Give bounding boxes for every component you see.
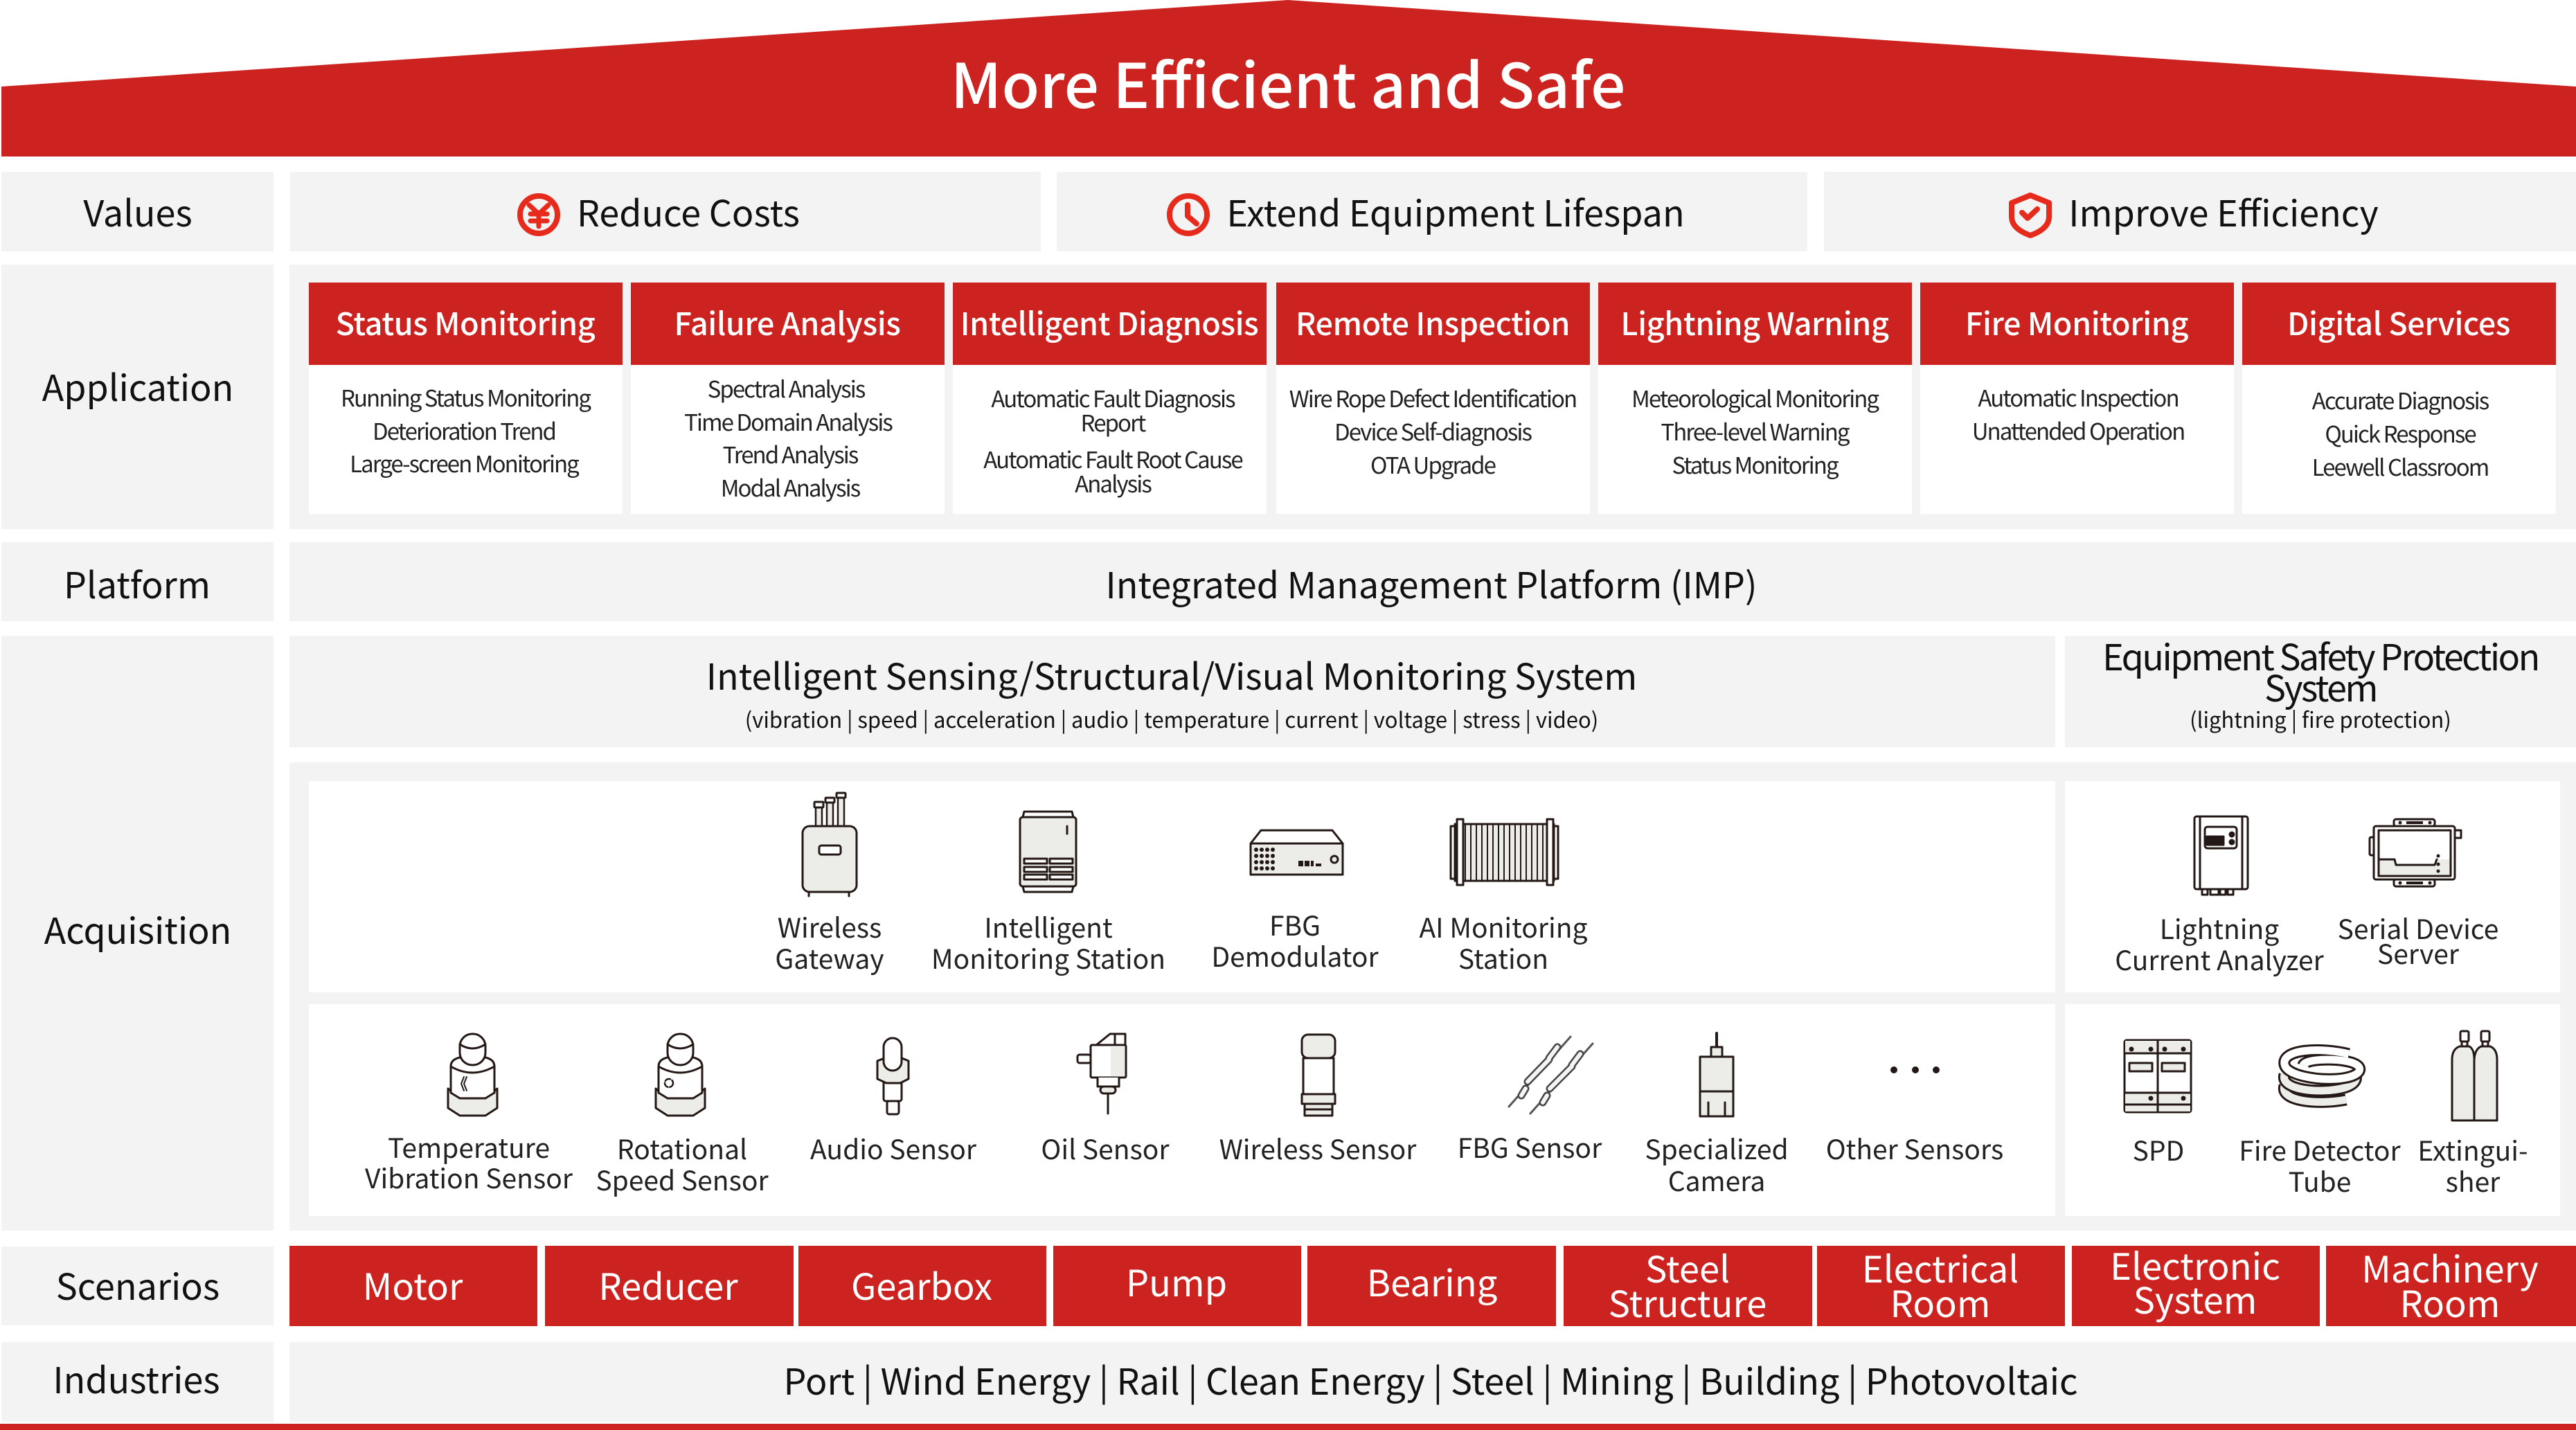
icon: extinguisher xyxy=(2452,1031,2497,1120)
icon: clock xyxy=(1170,196,1207,233)
label: serial device server: Serial Device xyxy=(2338,909,2498,947)
icon: spd xyxy=(2125,1040,2191,1112)
heading: equipment safety protection system xyxy=(2065,629,2576,747)
scenario: machinery room: Machinery xyxy=(2361,1241,2539,1294)
scenario: machinery room xyxy=(2326,1241,2576,1328)
label: wireless gateway xyxy=(775,907,884,977)
label: acquisition: Acquisition xyxy=(44,902,231,954)
icon: ai monitoring station xyxy=(1451,819,1558,885)
row: scenarios xyxy=(1,1238,2576,1328)
card: intelligent diagnosis: Analysis xyxy=(1075,466,1152,499)
icon: serial device server xyxy=(2370,819,2461,886)
scenario: steel structure: Steel xyxy=(1645,1241,1730,1294)
card: lightning warning: Three-level Warning xyxy=(1661,414,1850,447)
icon: temperature vibration sensor xyxy=(448,1034,497,1116)
label: serial device server xyxy=(2338,909,2498,972)
label: application: Application xyxy=(42,359,233,411)
card: remote inspection xyxy=(1276,283,1590,514)
label: extinguisher: Extingui- xyxy=(2417,1130,2528,1169)
label: scenarios xyxy=(1,1246,274,1325)
label: industries xyxy=(1,1342,274,1422)
label: extinguisher xyxy=(2417,1130,2528,1200)
card: fire monitoring: Fire Monitoring xyxy=(1965,299,2188,344)
card: digital services: Quick Response xyxy=(2325,416,2476,449)
card: intelligent diagnosis: Automatic Fault Root Cause xyxy=(983,442,1242,475)
card: lightning warning xyxy=(1598,283,1912,514)
scenario: reducer: Reducer xyxy=(598,1258,738,1311)
value: improve efficiency xyxy=(1824,172,2576,251)
panel: gateway devices xyxy=(309,781,2055,992)
roof banner with title xyxy=(1,0,2576,157)
card: remote inspection: Wire Rope Defect Identification xyxy=(1289,381,1576,414)
heading: equipment safety protection system: Equipment Safety Protection xyxy=(2102,629,2539,681)
value: reduce costs xyxy=(290,172,1041,251)
value: extend equipment lifespan: Extend Equipment Lifespan xyxy=(1226,185,1685,237)
card: status monitoring: Running Status Monitoring xyxy=(341,380,591,413)
label: rotational speed sensor xyxy=(596,1129,769,1199)
label: lightning current analyzer: Current Analyzer xyxy=(2115,940,2325,978)
label: fbg demodulator xyxy=(1211,905,1379,975)
label: fbg demodulator: Demodulator xyxy=(1211,936,1379,975)
card: lightning warning: Lightning Warning xyxy=(1620,299,1889,344)
scenario: steel structure: Structure xyxy=(1609,1276,1766,1328)
icon: oil sensor xyxy=(1077,1034,1126,1114)
icon: fbg sensor xyxy=(1509,1037,1593,1114)
card: fire monitoring xyxy=(1920,283,2234,514)
icon: yen coin xyxy=(520,196,557,233)
label: acquisition xyxy=(1,636,274,1231)
row: acquisition xyxy=(1,629,2576,1231)
panel: sensors xyxy=(309,1004,2055,1216)
card: failure analysis: Modal Analysis xyxy=(721,470,861,503)
card: status monitoring xyxy=(309,283,623,514)
icon: shield check xyxy=(2012,195,2049,235)
industries list: Port | Wind Energy | Rail | Clean Energy | Steel | Mining | Building | Photovoltaic xyxy=(783,1353,2078,1405)
panel: safety devices top xyxy=(2065,781,2560,992)
panel: safety devices bottom xyxy=(2065,1004,2560,1216)
scenario: motor xyxy=(289,1246,537,1326)
label: fbg demodulator: FBG xyxy=(1269,905,1321,944)
platform bar: Integrated Management Platform (IMP) xyxy=(1105,557,1757,609)
row: industries xyxy=(1,1342,2576,1422)
card: failure analysis xyxy=(631,283,945,514)
label: intelligent monitoring station xyxy=(931,907,1165,977)
scenario: gearbox xyxy=(798,1246,1046,1326)
card: status monitoring: Large-screen Monitoring xyxy=(350,446,580,479)
scenario: steel structure xyxy=(1564,1241,1812,1328)
icon: intelligent monitoring station xyxy=(1020,812,1076,892)
icon: audio sensor xyxy=(877,1038,909,1114)
label: platform: Platform xyxy=(64,557,211,609)
label: wireless sensor: Wireless Sensor xyxy=(1219,1129,1417,1168)
card: digital services: Digital Services xyxy=(2287,299,2510,344)
icon: specialized camera xyxy=(1700,1033,1733,1116)
heading: equipment safety protection system: System xyxy=(2264,660,2377,712)
label: specialized camera: Camera xyxy=(1668,1161,1765,1199)
industries list xyxy=(289,1342,2576,1422)
label: lightning current analyzer xyxy=(2115,909,2325,978)
value: reduce costs: Reduce Costs xyxy=(577,185,800,237)
bottom red bar xyxy=(0,1424,2576,1430)
label: intelligent monitoring station: Intelligent xyxy=(984,907,1113,946)
card: fire monitoring: Automatic Inspection xyxy=(1978,380,2179,413)
icon: fbg demodulator xyxy=(1251,830,1343,875)
scenario: gearbox: Gearbox xyxy=(851,1258,992,1311)
label: rotational speed sensor: Speed Sensor xyxy=(596,1160,769,1199)
scenario: electrical room: Electrical xyxy=(1862,1241,2019,1294)
scenario: electrical room: Room xyxy=(1890,1276,1991,1328)
label: temperature vibration sensor: Vibration Sensor xyxy=(365,1158,573,1197)
label: rotational speed sensor: Rotational xyxy=(617,1129,747,1168)
value: improve efficiency: Improve Efficiency xyxy=(2068,185,2379,237)
label: application xyxy=(1,265,274,529)
card: lightning warning: Meteorological Monitoring xyxy=(1631,381,1879,414)
card: failure analysis: Trend Analysis xyxy=(723,437,859,470)
label: temperature vibration sensor xyxy=(365,1127,573,1197)
scenario: pump xyxy=(1053,1246,1301,1326)
card: status monitoring: Deterioration Trend xyxy=(373,413,555,447)
label: fbg sensor: FBG Sensor xyxy=(1458,1127,1602,1166)
scenario: reducer xyxy=(545,1246,794,1326)
label: fire detector tube: Tube xyxy=(2289,1161,2351,1200)
panel: application cards xyxy=(289,265,2576,529)
card: remote inspection: Device Self-diagnosis xyxy=(1334,414,1532,447)
card: digital services xyxy=(2242,283,2556,514)
icon: fire detector tube xyxy=(2284,1051,2360,1102)
scenario: machinery room: Room xyxy=(2399,1276,2501,1328)
heading: intelligent sensing system: Intelligent Sensing/Structural/Visual Monitoring System xyxy=(706,648,1637,700)
label: platform xyxy=(1,542,274,621)
card: remote inspection: Remote Inspection xyxy=(1296,299,1570,344)
scenario: electronic system: Electronic xyxy=(2110,1238,2280,1291)
platform bar xyxy=(289,542,2576,621)
label: ai monitoring station: Station xyxy=(1458,938,1548,977)
row: values xyxy=(1,172,2576,251)
scenario: electronic system: System xyxy=(2134,1272,2257,1325)
label: spd: SPD xyxy=(2133,1130,2184,1169)
icon: lightning current analyzer xyxy=(2194,816,2248,895)
label: values xyxy=(1,172,274,251)
icon: rotational speed sensor xyxy=(656,1034,705,1116)
label: specialized camera xyxy=(1645,1129,1789,1199)
label: temperature vibration sensor: Temperature xyxy=(388,1127,550,1166)
card: digital services: Leewell Classroom xyxy=(2312,449,2488,483)
icon: more sensors dots xyxy=(1890,1066,1940,1073)
card: intelligent diagnosis: Report xyxy=(1081,405,1146,438)
card: failure analysis: Time Domain Analysis xyxy=(684,404,893,438)
label: specialized camera: Specialized xyxy=(1645,1129,1789,1168)
label: serial device server: Server xyxy=(2377,933,2460,972)
label: lightning current analyzer: Lightning xyxy=(2160,909,2279,947)
label: ai monitoring station xyxy=(1419,907,1588,977)
label: wireless gateway: Wireless xyxy=(778,907,882,946)
label: industries: Industries xyxy=(53,1352,220,1404)
scenario: bearing: Bearing xyxy=(1367,1255,1497,1307)
card: intelligent diagnosis xyxy=(953,283,1267,514)
heading: intelligent sensing system: (vibration | speed | acceleration | audio | temperature | current | voltage | stress | video) xyxy=(745,703,1598,734)
label: ai monitoring station: AI Monitoring xyxy=(1419,907,1588,946)
icon: wireless gateway xyxy=(803,793,857,896)
heading: intelligent sensing system xyxy=(289,636,2055,747)
label: other sensors: Other Sensors xyxy=(1826,1129,2003,1168)
scenario: motor: Motor xyxy=(363,1258,463,1311)
scenario: electrical room xyxy=(1817,1241,2065,1328)
card: fire monitoring: Unattended Operation xyxy=(1972,413,2184,447)
label: fire detector tube: Fire Detector xyxy=(2239,1130,2401,1169)
value: extend equipment lifespan xyxy=(1057,172,1807,251)
card: digital services: Accurate Diagnosis xyxy=(2312,383,2489,416)
card: remote inspection: OTA Upgrade xyxy=(1370,447,1496,481)
card: intelligent diagnosis: Intelligent Diagnosis xyxy=(960,299,1258,344)
scenario: bearing xyxy=(1307,1246,1556,1326)
card: intelligent diagnosis: Automatic Fault Diagnosis xyxy=(991,381,1235,414)
card: failure analysis: Failure Analysis xyxy=(674,299,900,344)
scenario: electronic system xyxy=(2072,1238,2320,1326)
label: fire detector tube xyxy=(2239,1130,2401,1200)
label: scenarios: Scenarios xyxy=(56,1258,220,1310)
card: lightning warning: Status Monitoring xyxy=(1672,447,1839,481)
label: audio sensor: Audio Sensor xyxy=(810,1129,977,1168)
heading: equipment safety protection system: (lightning | fire protection) xyxy=(2190,703,2451,734)
scenario: pump: Pump xyxy=(1126,1255,1227,1307)
icon: wireless sensor xyxy=(1302,1035,1335,1116)
label: oil sensor: Oil Sensor xyxy=(1041,1129,1170,1168)
row: application xyxy=(1,265,2576,529)
label: wireless gateway: Gateway xyxy=(775,938,884,977)
label: extinguisher: sher xyxy=(2446,1161,2501,1200)
row: platform xyxy=(1,542,2576,621)
label: values: Values xyxy=(83,185,193,237)
card: status monitoring: Status Monitoring xyxy=(336,299,596,344)
card: failure analysis: Spectral Analysis xyxy=(708,371,866,404)
label: intelligent monitoring station: Monitoring Station xyxy=(931,938,1165,977)
title: More Efficient and Safe xyxy=(951,37,1625,126)
panel: devices background xyxy=(289,762,2576,1231)
